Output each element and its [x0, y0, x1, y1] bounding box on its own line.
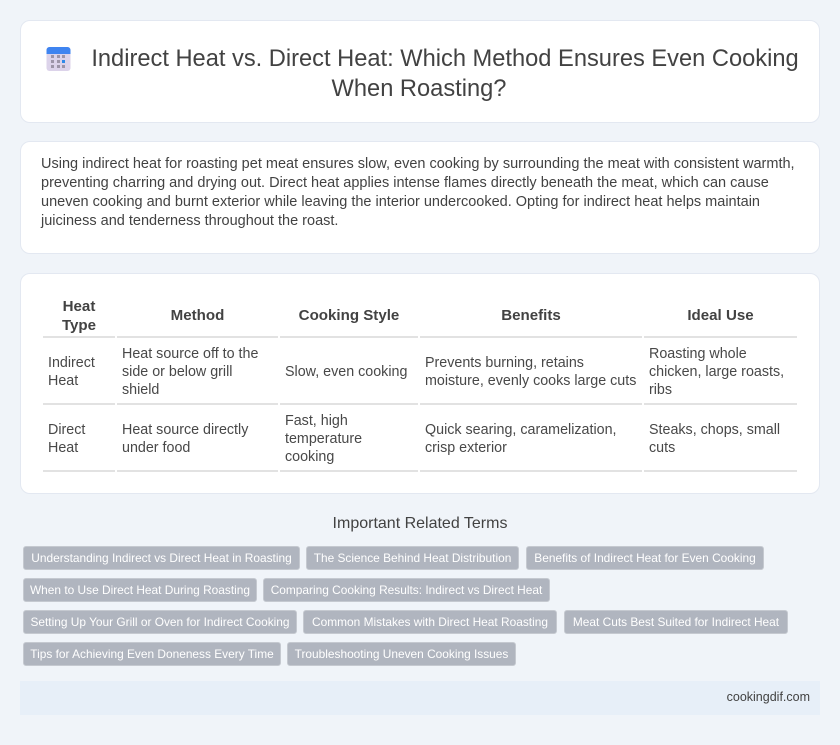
- tag: [23, 642, 281, 666]
- tag: Meat Cuts Best Suited for Indirect Heat: [573, 615, 779, 629]
- row: direct heat: Fast, high: [285, 413, 348, 429]
- tag: Comparing Cooking Results: Indirect vs Direct Heat: [271, 583, 542, 597]
- panel: title card: [20, 20, 820, 123]
- tag: Common Mistakes with Direct Heat Roasting: [312, 615, 548, 629]
- row: direct heat: Heat source directly: [122, 422, 248, 438]
- row: indirect heat: Roasting whole: [649, 346, 747, 362]
- title: When Roasting?: [332, 76, 506, 102]
- tag: Benefits of Indirect Heat for Even Cooking: [534, 551, 756, 565]
- row: indirect heat: ribs: [649, 382, 672, 398]
- footer source: cookingdif.com: [727, 690, 810, 704]
- tag: Tips for Achieving Even Doneness Every Time: [30, 647, 274, 661]
- panel: comparison table card: [20, 273, 820, 494]
- column heading: benefits: Benefits: [501, 307, 561, 324]
- tag: [526, 546, 764, 570]
- icon: calendar: [46, 47, 70, 71]
- column heading: cooking style: Cooking Style: [299, 307, 399, 324]
- heading: important related terms: Important Related Terms: [333, 515, 507, 532]
- column heading: method: Method: [171, 307, 224, 324]
- row: indirect heat: Heat: [48, 373, 78, 389]
- related term tags: [23, 546, 788, 666]
- row: indirect heat: Slow, even cooking: [285, 364, 407, 380]
- tag: The Science Behind Heat Distribution: [314, 551, 511, 565]
- column heading: ideal use: Ideal Use: [687, 307, 754, 324]
- title: [91, 46, 799, 102]
- row: direct heat: Heat: [48, 440, 78, 456]
- summary text: juiciness and tenderness throughout the roast.: [41, 213, 338, 229]
- row: indirect heat: moisture, evenly cooks large cuts: [425, 373, 636, 389]
- row: direct heat: Direct: [48, 422, 85, 438]
- summary text: [40, 156, 795, 229]
- row: indirect heat: Indirect: [48, 355, 95, 371]
- panel: summary card: [20, 141, 820, 254]
- column heading: heat type: [62, 298, 96, 334]
- tag: [23, 578, 257, 602]
- tag: [306, 546, 519, 570]
- row: indirect heat: Heat source off to the: [122, 346, 258, 362]
- tag: Understanding Indirect vs Direct Heat in Roasting: [31, 551, 292, 565]
- tag: [287, 642, 516, 666]
- column heading: heat type: Heat: [63, 298, 95, 315]
- row: direct heat: Quick searing, caramelization,: [425, 422, 617, 438]
- row: direct heat: crisp exterior: [425, 440, 507, 456]
- row: direct heat: under food: [122, 440, 190, 456]
- row: indirect heat: chicken, large roasts,: [649, 364, 784, 380]
- summary text: uneven cooking and burnt exterior while leaving the interior undercooked. Opting for indirect heat helps maintain: [41, 194, 760, 210]
- column heading: heat type: Type: [62, 317, 96, 334]
- tag: [23, 546, 300, 570]
- row: indirect heat: side or below grill: [122, 364, 232, 380]
- summary text: Using indirect heat for roasting pet meat ensures slow, even cooking by surrounding the meat with consistent warmth,: [41, 156, 795, 172]
- tag: [263, 578, 550, 602]
- comparison table: [43, 298, 797, 472]
- row: indirect heat: shield: [122, 382, 159, 398]
- row: direct heat: [48, 413, 780, 465]
- tag: [303, 610, 557, 634]
- row: direct heat: cuts: [649, 440, 675, 456]
- tag: Troubleshooting Uneven Cooking Issues: [295, 647, 508, 661]
- title: Indirect Heat vs. Direct Heat: Which Method Ensures Even Cooking: [91, 46, 799, 72]
- row: indirect heat: Prevents burning, retains: [425, 355, 584, 371]
- row: direct heat: Steaks, chops, small: [649, 422, 780, 438]
- summary text: preventing charring and drying out. Direct heat applies intense flames directly beneath the meat, which can cause: [41, 175, 769, 191]
- row: indirect heat: [48, 346, 784, 398]
- row: direct heat: cooking: [285, 449, 334, 465]
- tag: Setting Up Your Grill or Oven for Indirect Cooking: [30, 615, 290, 629]
- tag: When to Use Direct Heat During Roasting: [30, 583, 250, 597]
- row: direct heat: temperature: [285, 431, 362, 447]
- footer bar: [20, 681, 820, 715]
- tag: [23, 610, 297, 634]
- tag: [564, 610, 788, 634]
